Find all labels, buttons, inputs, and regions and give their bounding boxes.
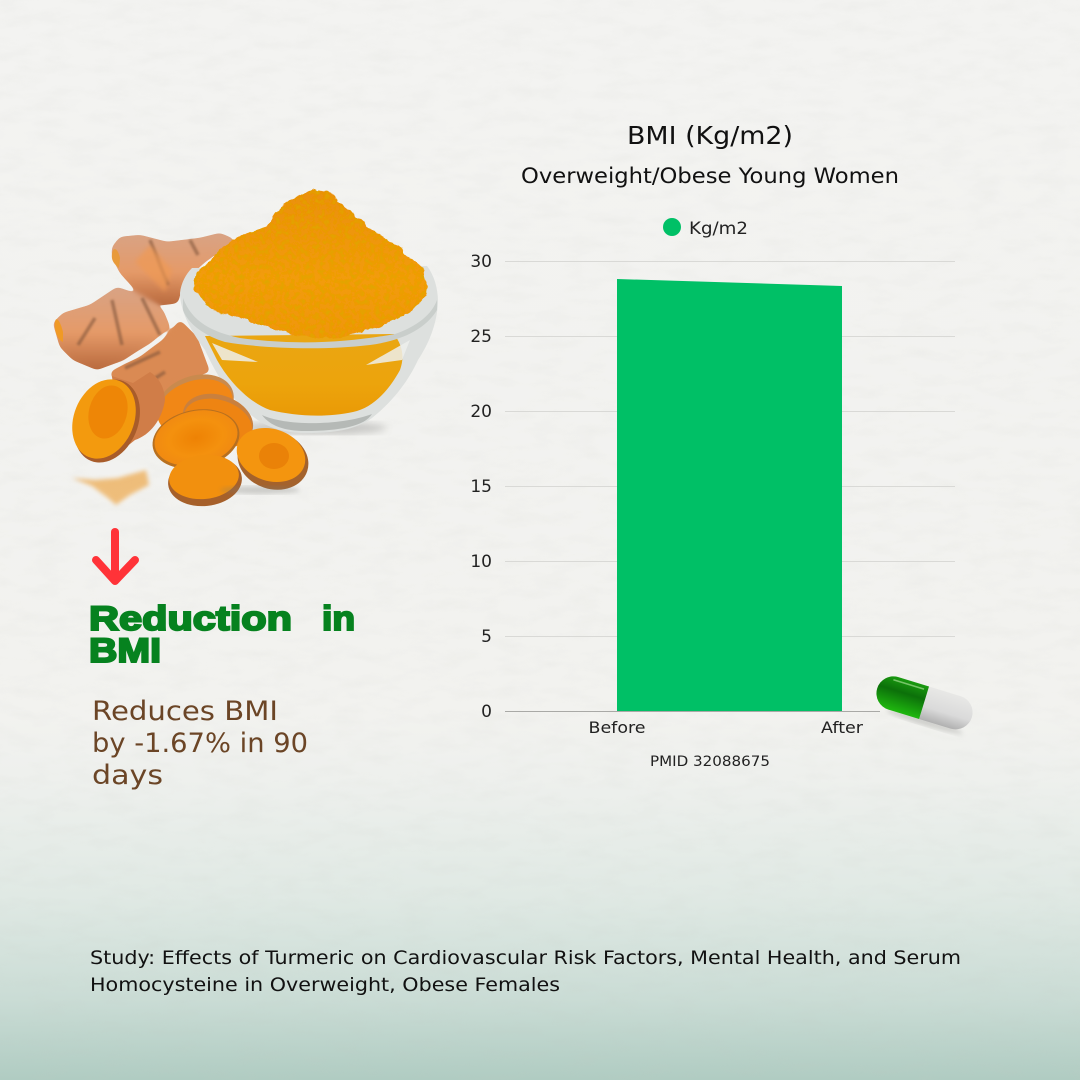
heading: Reduction in BMI: [89, 600, 355, 670]
heading: Reduction in BMI: in: [322, 600, 355, 638]
text: reduces BMI description: Reduces BMI: [92, 696, 278, 727]
x axis labels: [588, 718, 863, 737]
icon: green and white capsule: [871, 672, 977, 738]
image: turmeric roots, slices and powder bowl: [53, 189, 438, 510]
x axis labels: Before: [588, 718, 646, 737]
shadow under slices: [220, 486, 300, 494]
text: study citation: [90, 947, 961, 996]
chart: BMI bar chart: [470, 121, 955, 770]
text: reduces BMI description: by -1.67% in 90: [92, 728, 308, 759]
bar: [617, 279, 842, 711]
turmeric showing through bowl: [205, 334, 402, 416]
y axis labels: 10: [470, 552, 492, 572]
scattered powder: [72, 470, 149, 505]
y axis labels: [470, 252, 492, 722]
y axis labels: 0: [481, 702, 492, 722]
x axis labels: After: [821, 718, 863, 737]
icon: red down arrow: [96, 532, 135, 581]
text: reduces BMI description: [92, 696, 308, 791]
source note: PMID 32088675: [650, 754, 770, 770]
turmeric powder mound: [193, 189, 428, 338]
root pieces: [53, 233, 236, 433]
sliced turmeric: [61, 364, 316, 510]
chart subtitle: Overweight/Obese Young Women: [521, 164, 899, 188]
y axis labels: 30: [470, 252, 492, 272]
text: study citation: Study: Effects of Turmeric on Cardiovascular Risk Factors, Mental Health, and Serum: [90, 947, 961, 969]
legend: [663, 218, 748, 239]
y axis labels: 25: [470, 327, 492, 347]
glass bowl: [180, 266, 438, 433]
y axis labels: 5: [481, 627, 492, 647]
bowl shadow: [237, 422, 387, 434]
heading: Reduction in BMI: BMI: [89, 632, 161, 670]
y axis labels: 15: [470, 477, 492, 497]
y axis labels: 20: [470, 402, 492, 422]
text: reduces BMI description: days: [92, 760, 163, 791]
heading: Reduction in BMI: Reduction: [89, 600, 292, 638]
legend: Kg/m2: [689, 219, 748, 239]
chart title: BMI (Kg/m2): [627, 121, 793, 150]
text: study citation: Homocysteine in Overweight, Obese Females: [90, 974, 560, 996]
